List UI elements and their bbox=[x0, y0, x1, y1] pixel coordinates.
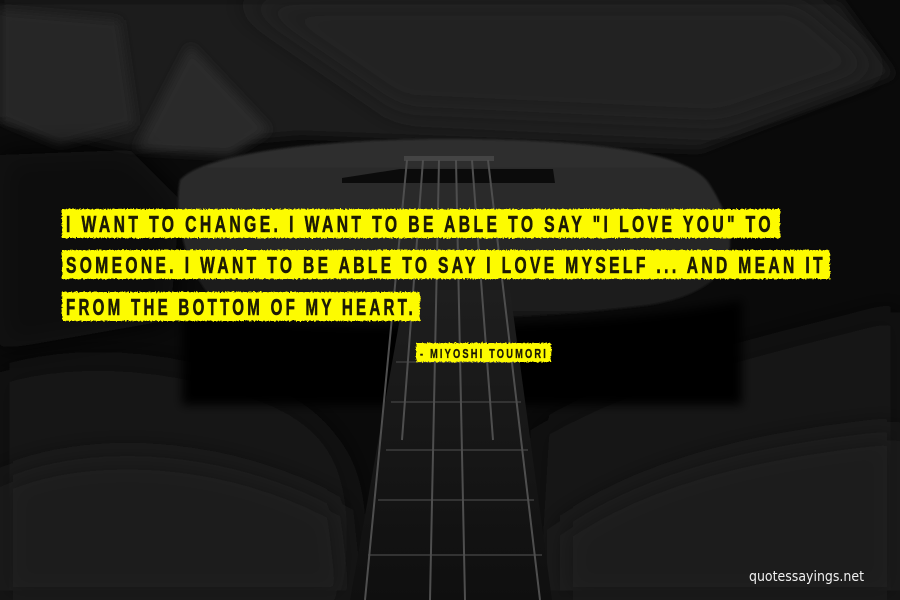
guitar bridge bbox=[342, 156, 555, 183]
highlight bars bbox=[62, 209, 830, 362]
quote line 3: FROM THE BOTTOM OF MY HEART. bbox=[66, 294, 416, 320]
watermark: quotessayings.net bbox=[749, 569, 864, 585]
quote text block bbox=[62, 209, 830, 362]
guitar body bbox=[178, 139, 742, 405]
attribution: - MIYOSHI TOUMORI bbox=[420, 346, 548, 361]
guitar neck and strings bbox=[350, 160, 552, 600]
